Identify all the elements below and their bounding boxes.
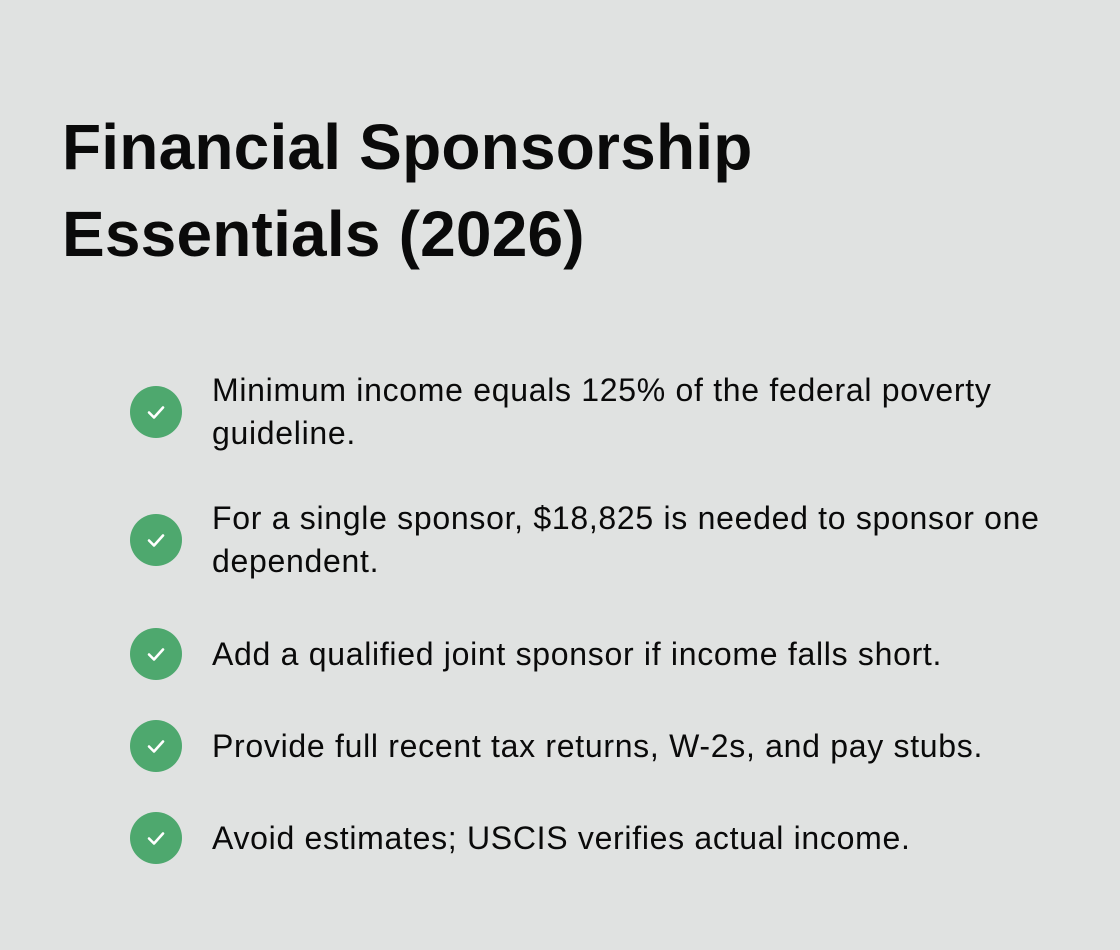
- icon: check: [130, 812, 182, 864]
- title: Essentials (2026): [62, 198, 585, 270]
- text: Avoid estimates; USCIS verifies actual income.: [212, 820, 911, 856]
- item 2: [130, 500, 1040, 579]
- text: guideline.: [212, 415, 356, 451]
- text: [212, 500, 1040, 579]
- icon: check: [130, 386, 182, 438]
- icon: check: [130, 720, 182, 772]
- item 3: [130, 628, 942, 680]
- item 4: [130, 720, 983, 772]
- icon: check: [130, 514, 182, 566]
- text: dependent.: [212, 543, 379, 579]
- item 5: [130, 812, 911, 864]
- item 1: [130, 372, 992, 451]
- text: [212, 372, 992, 451]
- title: [62, 111, 753, 270]
- title: Financial Sponsorship: [62, 111, 753, 183]
- icon: check: [130, 628, 182, 680]
- text: Add a qualified joint sponsor if income falls short.: [212, 636, 942, 672]
- text: Provide full recent tax returns, W-2s, and pay stubs.: [212, 728, 983, 764]
- text: Minimum income equals 125% of the federal poverty: [212, 372, 992, 408]
- text: For a single sponsor, $18,825 is needed to sponsor one: [212, 500, 1040, 536]
